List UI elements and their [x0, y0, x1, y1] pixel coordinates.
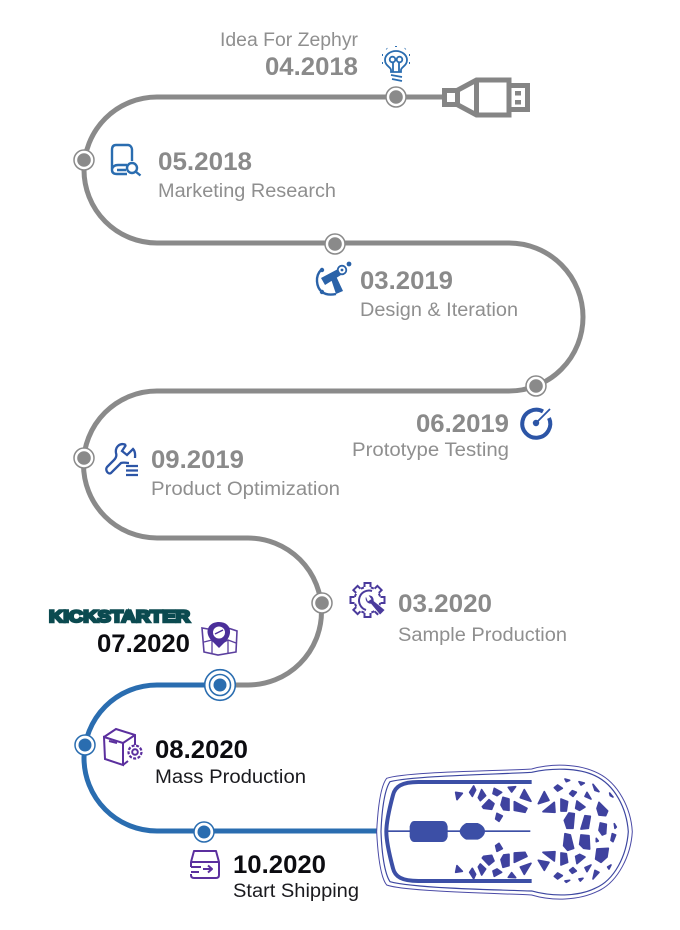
node: 03.2020	[312, 593, 332, 613]
icon: wrench with lines	[106, 444, 138, 475]
icon: design and iteration	[317, 262, 351, 295]
side rail	[386, 782, 532, 881]
icon: book with magnifier	[112, 145, 140, 176]
text: 03.2020: 03.2020	[398, 590, 492, 618]
center line and scroll wheel	[385, 821, 530, 842]
text: Mass Production: Mass Production	[155, 767, 306, 788]
text: Product Optimization: Product Optimization	[151, 479, 340, 500]
node: 08.2020	[75, 735, 95, 755]
text: 09.2019: 09.2019	[151, 446, 244, 474]
text: Start Shipping: Start Shipping	[233, 881, 359, 902]
text: Sample Production: Sample Production	[398, 625, 567, 646]
icon: box with gear	[104, 729, 142, 765]
inner mouse shell	[381, 769, 628, 895]
text: KICKSTARTER logo: KICKSTARTER	[49, 607, 190, 626]
icon: light bulb	[382, 46, 410, 81]
node: 04.2018	[386, 87, 406, 107]
node: 10.2020	[194, 822, 214, 842]
text: Design & Iteration: Design & Iteration	[360, 300, 518, 321]
text: 10.2020: 10.2020	[233, 851, 326, 879]
icon: gear with wrench	[350, 583, 385, 617]
icon: gauge target	[522, 409, 550, 438]
text: Marketing Research: Marketing Research	[158, 181, 336, 202]
text: Idea For Zephyr: Idea For Zephyr	[220, 30, 359, 51]
node: 09.2019	[74, 448, 94, 468]
mouse illustration	[377, 765, 632, 899]
text: 05.2018: 05.2018	[158, 148, 252, 176]
timeline path: blue section	[84, 685, 380, 831]
text: 04.2018: 04.2018	[265, 53, 358, 81]
timeline path: grey section	[83, 97, 583, 685]
outer mouse shell	[377, 765, 632, 899]
perforation pattern	[456, 779, 616, 882]
node: 06.2019	[526, 376, 546, 396]
text: 03.2019: 03.2019	[360, 267, 453, 295]
node: 07.2020	[205, 670, 235, 700]
node: 03.2019	[325, 234, 345, 254]
icon: USB plug	[444, 80, 528, 115]
text: Prototype Testing: Prototype Testing	[352, 440, 509, 461]
text: 06.2019: 06.2019	[416, 410, 509, 438]
node: 05.2018	[74, 150, 94, 170]
text: 07.2020: 07.2020	[97, 630, 190, 658]
icon: shipping box	[191, 851, 219, 878]
text: 08.2020: 08.2020	[155, 736, 248, 764]
icon: map with pin	[202, 622, 237, 655]
